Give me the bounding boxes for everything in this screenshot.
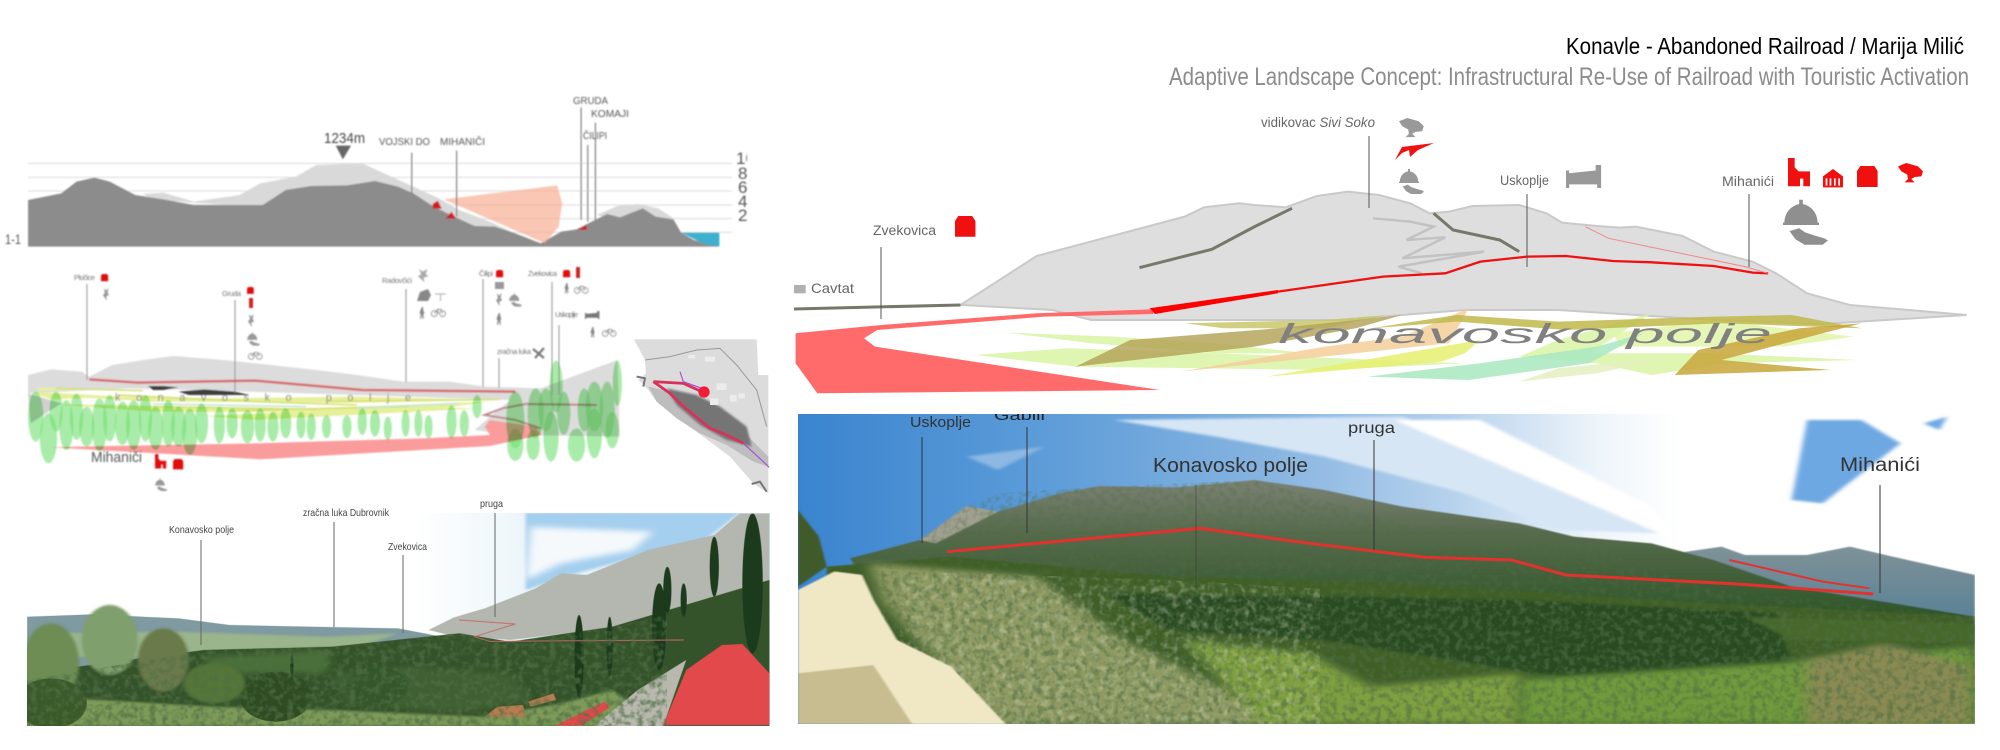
leader lines — [87, 279, 559, 395]
place labels: VOJSKI DO — [379, 136, 430, 148]
elevation scale numbers — [736, 152, 748, 222]
valley name: konavosko polje — [1278, 318, 1772, 349]
panel: main Konavle railway diagram — [794, 115, 1967, 393]
photo labels: Zvekovica — [388, 541, 427, 553]
elevation scale numbers: 6 — [738, 178, 747, 197]
station labels: Pločice — [74, 273, 95, 282]
photo scenery — [15, 513, 769, 728]
panel: photo main mountain — [798, 407, 1975, 725]
station labels: Radovčići — [382, 276, 412, 285]
peak height label: 1234m — [324, 130, 365, 147]
elevation grid and terrain — [28, 107, 732, 247]
place labels — [811, 115, 1774, 296]
place labels: ČILIPI — [583, 129, 607, 142]
place labels: vidikovac Sivi Soko — [1261, 115, 1375, 130]
photo labels — [169, 498, 503, 553]
photo labels: pruga — [480, 498, 503, 510]
red railway trace — [947, 528, 1873, 594]
place labels: Cavtat — [811, 281, 854, 296]
photo labels — [910, 414, 1920, 477]
title: Konavle - Abandoned Railroad / Marija Milić — [1566, 33, 1964, 59]
photo labels: Konavosko polje — [1153, 455, 1308, 477]
elevation scale numbers: 8 — [738, 164, 747, 183]
elevation scale numbers: 2 — [738, 206, 747, 225]
station labels — [74, 269, 578, 356]
station labels: Gruda — [222, 289, 242, 298]
station labels: zračna luka — [497, 347, 532, 356]
section label: 1-1 — [5, 231, 21, 247]
photo labels: zračna luka Dubrovnik — [303, 507, 390, 519]
mountain texture — [850, 480, 1975, 620]
clipped label Gabili: Gabili — [994, 407, 1045, 424]
map territory — [634, 339, 768, 493]
photo texture — [27, 616, 667, 726]
elevation scale numbers: 4 — [738, 192, 747, 211]
place labels: KOMAJI — [591, 108, 629, 120]
place labels — [379, 95, 629, 148]
Mihanići label: Mihaniči — [91, 449, 142, 466]
photo scenery — [798, 417, 1975, 724]
place labels: Uskoplje — [1500, 173, 1549, 188]
panel: photo Konavosko polje — [15, 513, 770, 728]
map: Konavle location — [634, 339, 769, 493]
mountain, railway and field patches — [794, 192, 1967, 393]
station labels: Čilipi — [479, 269, 493, 278]
panel: elevation cross-section 1-1 — [5, 95, 755, 247]
leader lines — [201, 513, 495, 645]
photo labels: pruga — [1348, 420, 1395, 437]
elevation scale numbers: 10 — [736, 149, 755, 168]
place labels: Mihanići — [1722, 174, 1774, 189]
station icons — [101, 267, 616, 491]
railway route — [653, 382, 743, 443]
photo labels: Uskoplje — [910, 414, 971, 431]
place labels: GRUDA — [573, 95, 608, 107]
photo labels: Konavosko polje — [169, 524, 234, 536]
place labels: MIHANIČI — [440, 135, 485, 148]
station labels: Zvekovica — [528, 269, 558, 278]
panel: Konavle valley strip diagram — [28, 267, 622, 491]
place labels: Zvekovica — [873, 223, 936, 238]
icons: tourism activities — [955, 118, 1923, 245]
station labels: Uskoplje — [555, 310, 578, 319]
valley terrain and greenery — [28, 356, 622, 463]
leader lines — [881, 136, 1749, 319]
photo labels: Mihanići — [1840, 455, 1920, 476]
leader lines — [922, 427, 1880, 593]
photo texture — [827, 565, 1975, 725]
valley name: konavosko polje — [115, 392, 411, 404]
